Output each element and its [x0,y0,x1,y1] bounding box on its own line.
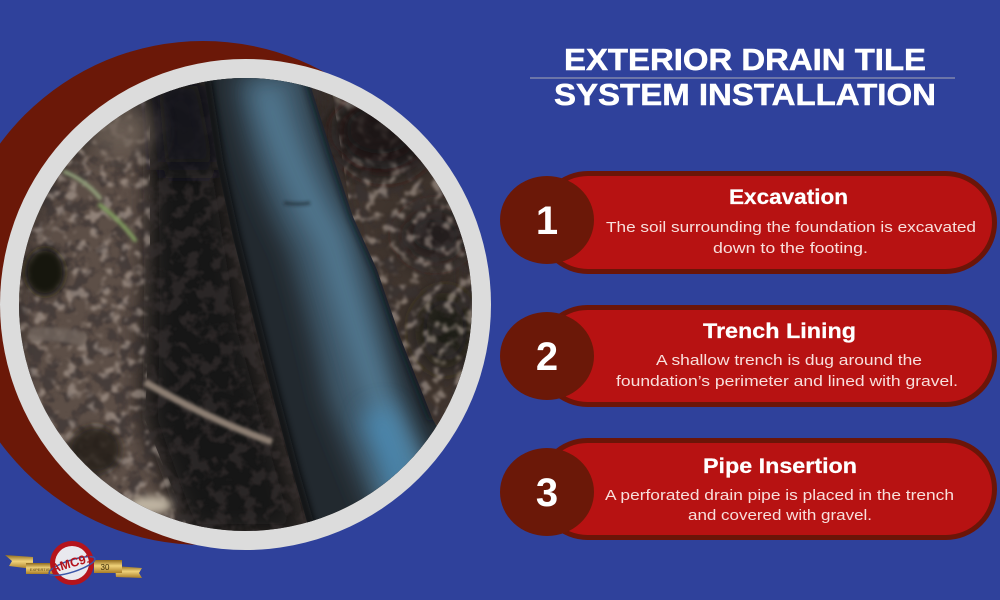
step 1: excavation [500,174,994,272]
step 3: pipe insertion: 3 [536,471,558,515]
soil grain [19,78,473,532]
logo: AMC91 ribbon badge: 30 [101,563,110,572]
step 3: pipe insertion: Pipe Insertion [703,455,857,478]
logo: AMC91 ribbon badge: AMC91 [50,551,94,576]
step 2: trench lining: A shallow trench is dug around the [656,352,922,369]
logo: AMC91 ribbon badge: EXPERTISE [30,567,53,572]
dark red backing circle [0,41,455,545]
step 2: trench lining: Trench Lining [703,320,856,343]
step 3: pipe insertion: and covered with gravel. [688,507,872,524]
step 1: excavation: down to the footing. [713,240,868,257]
title: EXTERIOR DRAIN TILE [564,42,926,77]
pipe [204,78,436,522]
title: SYSTEM INSTALLATION [554,77,936,112]
step 1: excavation: The soil surrounding the foundation is excavated [606,219,976,236]
step 2: trench lining [500,308,994,404]
root strand [30,334,272,442]
step 1: excavation: Excavation [729,186,848,209]
step 3: pipe insertion: A perforated drain pipe is placed in the trench [605,487,954,504]
title [530,42,955,112]
logo: AMC91 ribbon badge [5,541,142,585]
dark clumps and blurred top soil [25,78,422,474]
step 2: trench lining: foundation’s perimeter and lined with gravel. [616,373,958,390]
pale stone [128,496,172,514]
photo: drain pipe in soil [19,70,475,540]
step 2: trench lining: 2 [536,335,558,379]
grass blades [65,172,135,240]
soil base [19,78,475,532]
step 3: pipe insertion [500,440,994,538]
step 1: excavation: 1 [536,199,558,243]
photo ring [0,59,491,550]
